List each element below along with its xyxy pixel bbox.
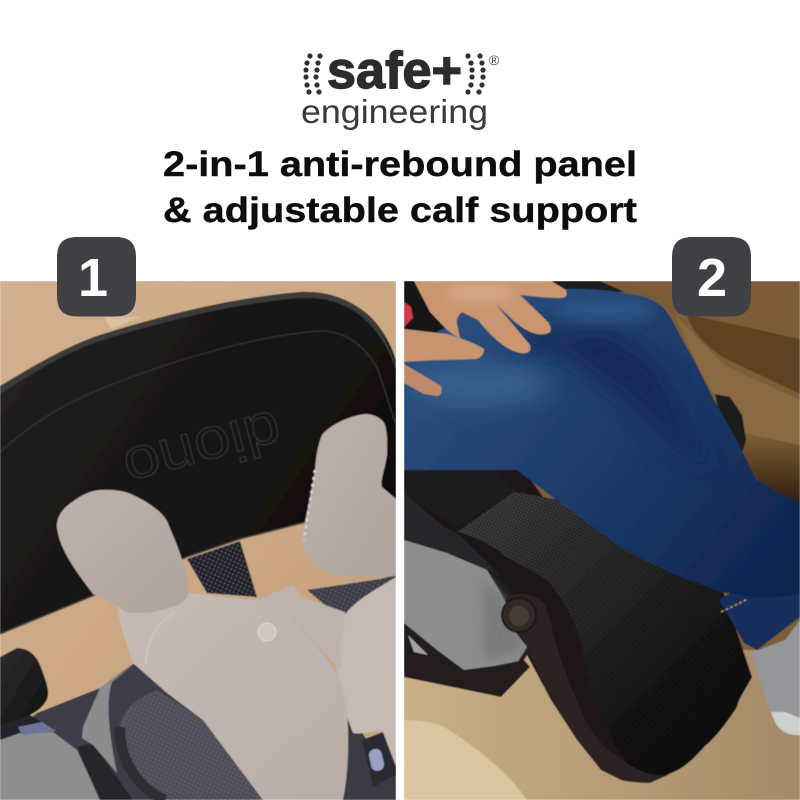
embossed diono logo: diono bbox=[117, 397, 288, 502]
jeans cuff bbox=[719, 590, 800, 650]
grey wedge in frame bbox=[408, 635, 428, 655]
calf support mesh bbox=[457, 492, 752, 783]
calf bracket arm bbox=[505, 594, 668, 783]
hand knuckle highlight bbox=[445, 284, 515, 300]
pivot bolt cap bbox=[509, 606, 529, 626]
hand top bbox=[414, 281, 567, 353]
anti-rebound panel bbox=[0, 292, 396, 634]
logo subtitle: engineering bbox=[301, 93, 488, 130]
seat crease bbox=[105, 317, 140, 329]
seat border strap bbox=[404, 493, 500, 575]
logo dots left bbox=[303, 53, 323, 95]
panel: photo 1, anti-rebound panel with baby feet bbox=[0, 281, 396, 800]
badge 2 number: 2 bbox=[697, 248, 727, 308]
pants bbox=[404, 289, 800, 597]
black seat back top bbox=[548, 281, 625, 292]
buckle button bbox=[368, 748, 385, 772]
felt shading bbox=[480, 575, 525, 660]
sole grips bbox=[304, 470, 315, 540]
panel: photo 2, adjustable calf support with child's leg bbox=[404, 281, 800, 800]
shadow between legs bbox=[500, 325, 710, 470]
cushion lobe bbox=[404, 720, 527, 800]
black cylinder bbox=[0, 648, 48, 727]
red harness clip bbox=[404, 302, 413, 327]
logo dots right bbox=[465, 53, 486, 95]
panel lower edge bbox=[0, 520, 306, 636]
upper leg highlight bbox=[555, 298, 655, 322]
badge 2 bbox=[672, 237, 751, 316]
mesh gradient shading bbox=[457, 492, 752, 781]
pivot bolt bbox=[502, 598, 536, 632]
baby arm right bbox=[335, 577, 396, 765]
strap at left bbox=[404, 281, 445, 333]
grey felt left bbox=[0, 732, 100, 800]
panel inner recess line bbox=[0, 331, 396, 452]
door lower shadow bbox=[742, 434, 800, 504]
seat base, dark bbox=[32, 664, 257, 800]
heading line 1: 2-in-1 anti-rebound panel bbox=[163, 145, 637, 184]
seat buckle area bbox=[347, 718, 396, 784]
dark seat frame bbox=[404, 623, 530, 697]
lower leg highlight bbox=[410, 365, 550, 405]
baby left foot bbox=[57, 490, 189, 613]
grey felt centre bbox=[82, 665, 133, 773]
scrunched sleeve bbox=[257, 585, 345, 670]
baby right foot bbox=[302, 414, 396, 577]
harness strap bbox=[187, 541, 257, 597]
leg seam bbox=[146, 612, 175, 665]
dark seat underlay bbox=[404, 465, 645, 781]
dark strap mesh bbox=[77, 743, 133, 800]
grey felt base bbox=[404, 540, 527, 670]
blue seam bbox=[18, 722, 56, 735]
leather seat background bbox=[0, 281, 396, 800]
door armrest bbox=[687, 314, 800, 394]
sock bbox=[751, 620, 800, 735]
hand lower bbox=[404, 329, 484, 362]
cylinder behind leg bbox=[715, 394, 746, 460]
mesh seat bbox=[120, 690, 263, 800]
heading line 2: & adjustable calf support bbox=[163, 191, 637, 230]
cuff stitching bbox=[721, 599, 748, 612]
panel rim highlight bbox=[0, 292, 396, 394]
badge 1 bbox=[57, 237, 136, 316]
snap button bbox=[258, 623, 276, 641]
logo: safe+ engineering bbox=[301, 42, 500, 130]
buckle bbox=[362, 732, 396, 787]
door mid band bbox=[676, 318, 800, 444]
right seat piece bbox=[307, 576, 396, 615]
hand lower fingers bbox=[404, 364, 442, 396]
car door background bbox=[532, 281, 800, 651]
registered mark: ® bbox=[489, 52, 500, 68]
black pad under thigh bbox=[404, 465, 517, 527]
mesh seat border bbox=[120, 727, 165, 800]
logo wordmark: safe+ bbox=[327, 42, 462, 100]
floor and seat cushion bbox=[404, 650, 800, 800]
shoe sole bbox=[771, 712, 800, 735]
heading bbox=[163, 145, 637, 230]
baby body and leg bbox=[117, 593, 348, 800]
dark seat edge bbox=[0, 714, 41, 740]
badge 1 number: 1 bbox=[78, 248, 108, 308]
